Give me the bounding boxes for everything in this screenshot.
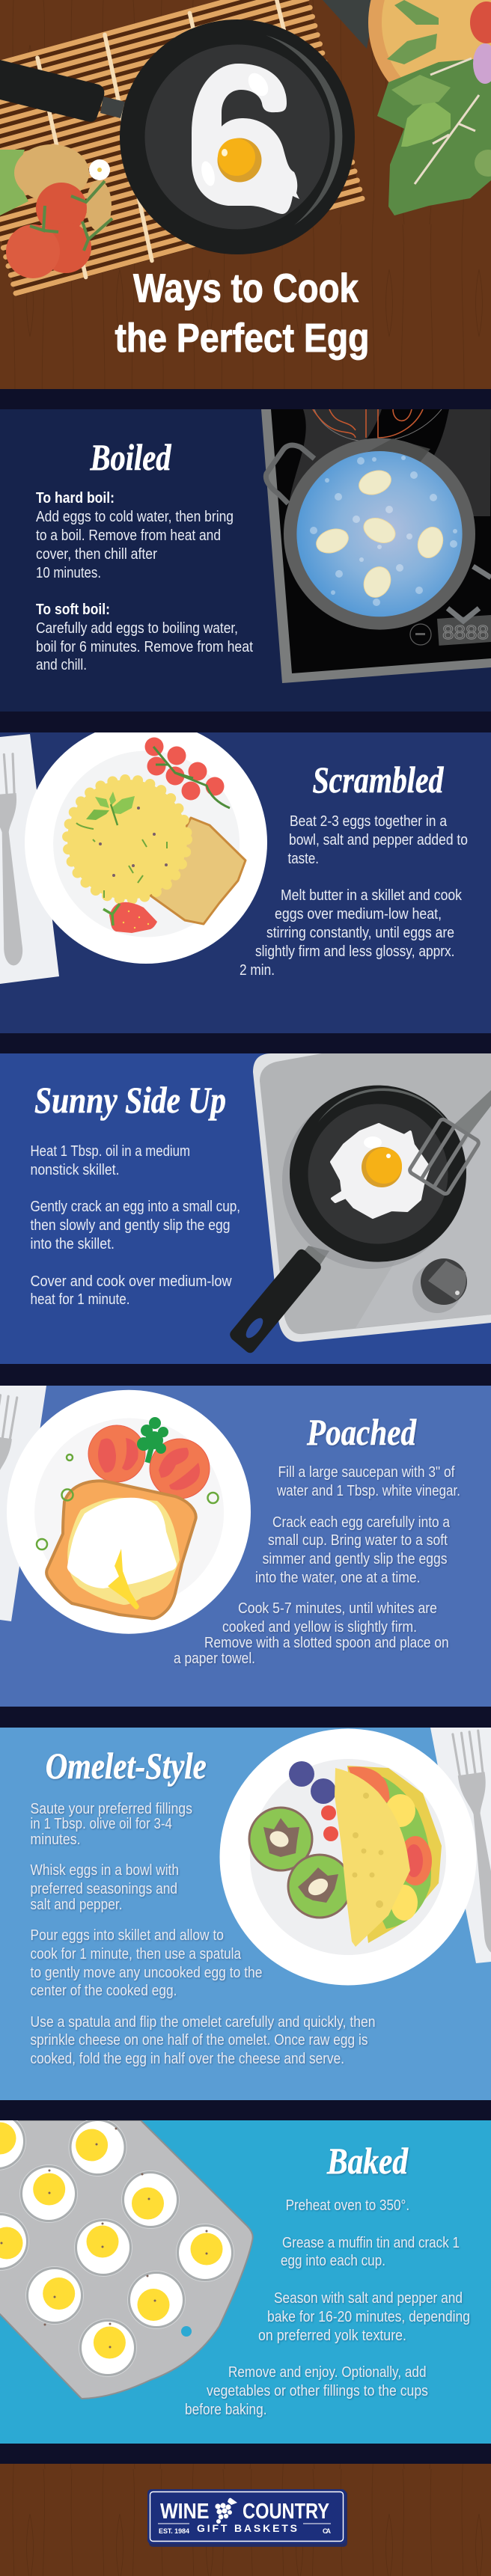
text block: Carefully add eggs to boiling water, (36, 620, 238, 637)
panel: sunny side up (0, 1053, 491, 1364)
text block: to a boil. Remove from heat and (36, 527, 221, 544)
text block: Cover and cook over medium-low (30, 1273, 232, 1290)
text block: to gently move any uncooked egg to the (30, 1965, 262, 1981)
text block (30, 1143, 240, 1308)
logo: Wine Country Gift Baskets (147, 2489, 347, 2547)
text block: Gently crack an egg into a small cup, (30, 1199, 240, 1215)
text block: cooked and yellow is slightly firm. (222, 1619, 417, 1636)
icon: pot handles (266, 445, 491, 621)
text block: nonstick skillet. (30, 1162, 120, 1178)
icon: salad bowl (368, 0, 491, 215)
title: the Perfect Egg (115, 316, 370, 361)
text block: Season with salt and pepper and (274, 2290, 463, 2307)
text block: Remove and enjoy. Optionally, add (228, 2364, 427, 2381)
text block: boil for 6 minutes. Remove from heat (36, 639, 253, 655)
icon: scrambled egg (67, 780, 187, 899)
text block: taste. (287, 851, 319, 867)
panel: boiled (0, 409, 491, 712)
text block: into the water, one at a time. (255, 1570, 421, 1586)
icon: spatula (409, 1090, 491, 1195)
text block: Pour eggs into skillet and allow to (30, 1927, 224, 1944)
logo: Wine Country Gift Baskets: CA (323, 2527, 331, 2535)
text block: simmer and gently slip the eggs (263, 1551, 448, 1567)
text block: Cook 5-7 minutes, until whites are (238, 1600, 437, 1617)
icon: frying pan with egg six (0, 19, 355, 254)
title: Ways to Cook (133, 266, 359, 311)
icon: plate of scrambled eggs (25, 721, 267, 964)
text block: Whisk eggs in a bowl with (30, 1862, 179, 1879)
text block: Fill a large saucepan with 3" of (278, 1464, 455, 1481)
text block: into the skillet. (30, 1236, 115, 1252)
icon: strawberry (103, 902, 157, 933)
logo: Wine Country Gift Baskets: EST. 1984 (159, 2527, 189, 2535)
text block: bowl, salt and pepper added to (289, 832, 468, 848)
text block: vegetables or other fillings to the cups (207, 2383, 428, 2399)
logo: Wine Country Gift Baskets: WINE (160, 2500, 210, 2524)
icon: basil leaves (86, 792, 135, 825)
icon: green onion rings (37, 1454, 219, 1549)
icon: bamboo mat (0, 0, 364, 298)
text block: Preheat oven to 350°. (286, 2197, 409, 2214)
icon: napkin and fork (430, 1728, 491, 1963)
logo: Wine Country Gift Baskets: GIFT BASKETS (197, 2522, 297, 2534)
icon: toast (150, 818, 246, 924)
text block: minutes. (30, 1832, 81, 1848)
text block (185, 2197, 470, 2418)
heading: Poached (306, 1411, 417, 1453)
icon: red berries (321, 1805, 338, 1841)
text block: 10 minutes. (36, 565, 101, 581)
text block: small cup. Bring water to a soft (268, 1532, 448, 1549)
icon: stove top (261, 409, 491, 683)
panel: baked (0, 2113, 491, 2444)
text block: slightly firm and less glossy, apprx. (255, 943, 455, 960)
text block (36, 490, 253, 673)
text block: To hard boil: (36, 490, 115, 507)
icon: cheese layer (67, 1498, 180, 1605)
icon: pepper specks (0, 2128, 208, 2348)
icon: poached egg white (67, 1498, 177, 1588)
text block: 2 min. (240, 962, 275, 979)
text block: Crack each egg carefully into a (272, 1514, 451, 1531)
text block: on preferred yolk texture. (258, 2328, 406, 2344)
panel: hero wood header (0, 0, 491, 389)
text block: cover, then chill after (36, 546, 157, 563)
logo: Wine Country Gift Baskets: COUNTRY (243, 2500, 329, 2524)
heading: Sunny Side Up (34, 1079, 226, 1121)
text block: Grease a muffin tin and crack 1 (282, 2235, 460, 2251)
icon: grapes (215, 2498, 237, 2524)
text block: Remove with a slotted spoon and place on (204, 1635, 449, 1651)
panel: wood footer (0, 2464, 491, 2576)
heading: Omelet-Style (46, 1745, 207, 1787)
text block: a paper towel. (174, 1650, 255, 1667)
icon: eggs in water (316, 470, 443, 598)
text block: water and 1 Tbsp. white vinegar. (276, 1483, 460, 1499)
text block: in 1 Tbsp. olive oil for 3-4 (30, 1816, 172, 1832)
text block: cooked, fold the egg in half over the cheese and serve. (30, 2051, 344, 2067)
text block: then slowly and gently slip the egg (30, 1217, 231, 1234)
icon: pot of boiling water (284, 438, 475, 630)
icon: omelet (335, 1766, 442, 1947)
text block: Heat 1 Tbsp. oil in a medium (30, 1143, 190, 1160)
icon: parsley (137, 1417, 168, 1463)
text block: Melt butter in a skillet and cook (281, 887, 463, 904)
icon: tomato slices (88, 1425, 210, 1499)
icon: dark cloth corner (323, 0, 376, 49)
text block: stirring constantly, until eggs are (266, 925, 454, 941)
icon: yolk (108, 1549, 139, 1609)
icon: stove knob (412, 1258, 467, 1313)
text block: eggs over medium-low heat, (275, 906, 442, 923)
text block: cook for 1 minute, then use a spatula (30, 1946, 242, 1962)
icon: stove display and button: 8888 (442, 621, 489, 643)
text block: To soft boil: (36, 602, 110, 618)
heading: Baked (326, 2140, 409, 2182)
text block: salt and pepper. (30, 1897, 123, 1913)
icon: napkin and fork (0, 734, 59, 984)
icon: stove surface (253, 1053, 491, 1341)
text block (30, 1801, 376, 2067)
panel: poached (0, 1386, 491, 1707)
text block (174, 1464, 460, 1667)
panel: scrambled (0, 721, 491, 1033)
text block: sprinkle cheese on one half of the omelet. Once raw egg is (30, 2032, 368, 2049)
icon: egg yolks (0, 2122, 223, 2358)
icon: plate with omelet and fruit (220, 1728, 476, 1986)
text block: preferred seasonings and (30, 1881, 177, 1897)
title (115, 266, 370, 361)
text block: center of the cooked egg. (30, 1983, 177, 1999)
icon: napkin and fork (0, 1386, 46, 1621)
icon: skillet with fried egg (282, 1086, 466, 1269)
icon: chive flecks (76, 823, 167, 898)
icon: potatoes, tomatoes and flower (0, 144, 112, 278)
text block: Use a spatula and flip the omelet carefully and quickly, then (30, 2014, 376, 2031)
text block: Saute your preferred fillings (30, 1801, 192, 1817)
heading: Boiled (90, 436, 171, 478)
text block: Beat 2-3 eggs together in a (290, 813, 448, 830)
heading: Scrambled (313, 759, 444, 801)
panel: omelet-style (0, 1728, 491, 2100)
text block: before baking. (185, 2402, 266, 2418)
icon: stove display and button (410, 614, 491, 646)
text block: egg into each cup. (281, 2253, 385, 2269)
icon: cherry tomatoes on vine (145, 738, 230, 808)
icon: skillet handle (230, 1246, 329, 1353)
text block (240, 813, 468, 979)
icon: kiwi slices (249, 1808, 351, 1918)
text block: Add eggs to cold water, then bring (36, 509, 234, 525)
text block: heat for 1 minute. (30, 1291, 130, 1308)
icon: blueberries (289, 1761, 336, 1804)
text block: and chill. (36, 657, 87, 673)
icon: muffin tin with eggs (0, 2113, 253, 2399)
icon: toast (46, 1481, 196, 1618)
icon: plate with poached egg on toast (7, 1390, 251, 1634)
